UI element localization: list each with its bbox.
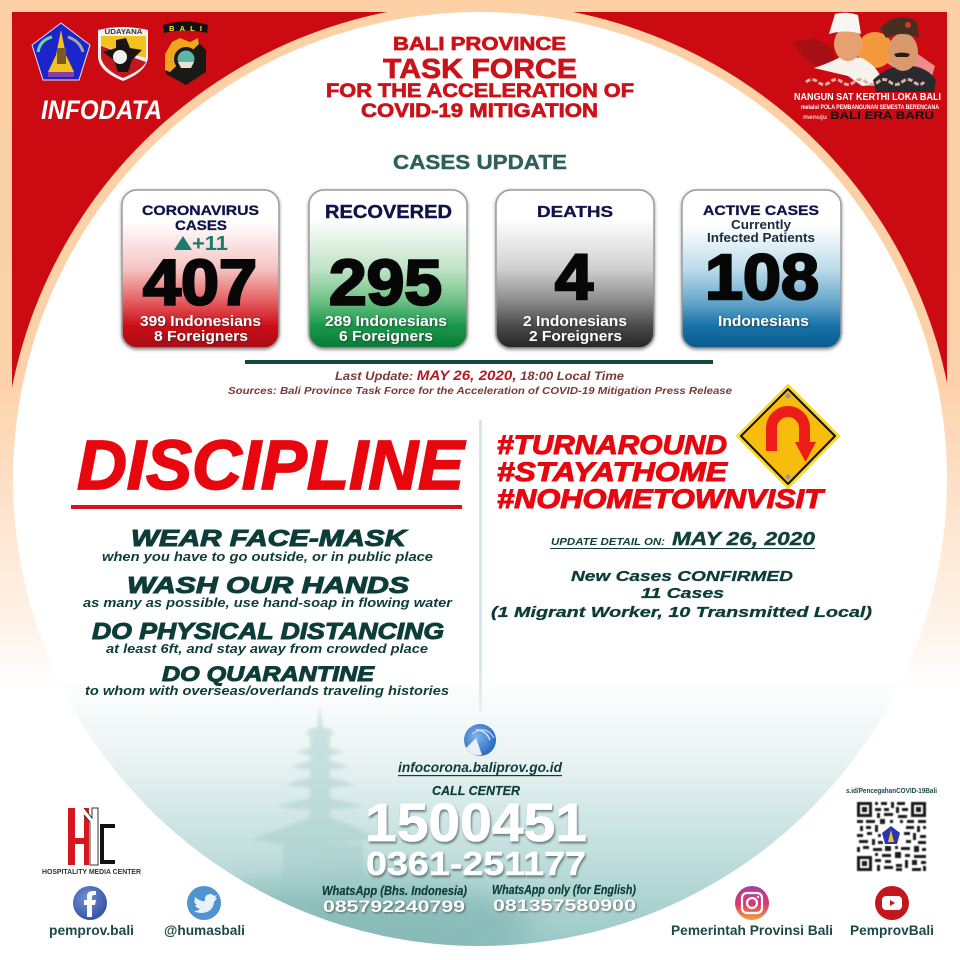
card subheading: Currently <box>731 217 792 232</box>
card heading: DEATHS <box>537 204 613 221</box>
last update line: Last Update: MAY 26, 2020, 18:00 Local Time <box>335 368 625 383</box>
icon: globe <box>464 724 496 756</box>
rule: quarantine <box>85 663 449 698</box>
breakdown: 2 Indonesians <box>523 313 627 330</box>
rule: wear face mask <box>102 525 433 564</box>
banner: Bali Era Baru governor portraits <box>793 13 941 122</box>
logo: Bali province crest <box>32 23 90 80</box>
panel: deaths <box>496 190 654 348</box>
icon: u-turn road sign <box>737 385 839 488</box>
card heading: ACTIVE CASES <box>703 202 819 218</box>
card heading: CORONAVIRUS <box>142 202 259 218</box>
facebook handle: pemprov.bali <box>49 922 134 938</box>
update detail date <box>550 529 815 549</box>
instagram name: Pemerintah Provinsi Bali <box>671 922 833 938</box>
divider rule <box>245 360 713 364</box>
icon: instagram <box>735 886 769 920</box>
panel: active cases <box>682 190 841 348</box>
title: BALI PROVINCE <box>393 34 566 54</box>
card heading <box>142 202 259 233</box>
title: TASK FORCE <box>383 53 577 84</box>
whatsapp indonesia <box>322 884 467 916</box>
right figure <box>873 17 936 92</box>
whatsapp english: 081357580900 <box>493 896 636 915</box>
rule: wear face mask: when you have to go outside, or in public place <box>102 549 433 564</box>
banner slogan: NANGUN SAT KERTHI LOKA BALI <box>794 92 941 103</box>
call center numbers: 1500451 <box>365 793 587 853</box>
rule: quarantine: DO QUARANTINE <box>162 663 375 686</box>
pagoda silhouette <box>240 706 380 888</box>
logo: hospitality media center <box>42 808 141 876</box>
call center numbers <box>365 793 587 882</box>
logo: hospitality media center: HOSPITALITY MEDIA CENTER <box>42 869 141 876</box>
left figure <box>814 13 884 86</box>
logo: Bali police badge: BALI <box>169 24 202 33</box>
rule: quarantine: to whom with overseas/overlands traveling histories <box>85 683 449 698</box>
new cases detail <box>491 568 872 621</box>
breakdown: 399 Indonesians <box>140 313 261 330</box>
qr code <box>857 802 926 871</box>
total number: 108 <box>705 241 819 313</box>
icon: twitter <box>187 886 221 920</box>
logo: Bali police badge <box>163 22 208 85</box>
card heading: RECOVERED <box>325 202 452 222</box>
title: FOR THE ACCELERATION OF <box>326 81 634 102</box>
banner menuju label: menuju <box>803 115 827 121</box>
total number: 4 <box>555 241 593 313</box>
youtube name: PemprovBali <box>850 922 934 938</box>
rule: wash hands <box>83 572 453 610</box>
hashtags <box>497 430 826 514</box>
call center numbers: 0361-251177 <box>366 845 586 882</box>
new cases detail: New Cases CONFIRMED <box>571 568 793 585</box>
discipline rules list <box>83 525 453 698</box>
whatsapp indonesia: WhatsApp (Bhs. Indonesia) <box>322 884 467 898</box>
icon: facebook <box>73 886 107 920</box>
daily increase <box>174 233 228 255</box>
bali map silhouette <box>793 38 838 68</box>
total number: 295 <box>329 246 442 318</box>
twitter handle: @humasbali <box>164 922 245 938</box>
whatsapp english <box>492 883 636 915</box>
infodata label: INFODATA <box>41 95 162 125</box>
sources line: Sources: Bali Province Task Force for the Acceleration of COVID-19 Mitigation Press Release <box>228 385 732 397</box>
rule: physical distancing: DO PHYSICAL DISTANCING <box>92 618 444 644</box>
whatsapp english: WhatsApp only (for English) <box>492 883 636 897</box>
title: COVID-19 MITIGATION <box>361 101 598 122</box>
breakdown <box>325 313 447 345</box>
update detail date: MAY 26, 2020 <box>672 529 815 549</box>
rule: physical distancing: at least 6ft, and stay away from crowded place <box>106 641 428 656</box>
teal lower gradient with pagoda <box>74 705 886 946</box>
card subheading <box>707 217 815 245</box>
rule: wear face mask: WEAR FACE-MASK <box>131 525 408 551</box>
new cases detail: 11 Cases <box>641 585 724 602</box>
ground haze <box>250 868 532 946</box>
daily increase: +11 <box>192 233 228 255</box>
logo: Udayana shield <box>98 27 148 81</box>
rule: wash hands: WASH OUR HANDS <box>127 572 410 598</box>
breakdown <box>523 313 627 345</box>
vertical column divider <box>479 420 482 712</box>
website: infocorona.baliprov.go.id <box>398 759 562 775</box>
qr link text: s.id/PencegahanCOVID-19Bali <box>846 788 937 795</box>
section heading: cases update: CASES UPDATE <box>393 152 567 174</box>
breakdown: 8 Foreigners <box>154 328 248 345</box>
breakdown: 2 Foreigners <box>529 328 622 345</box>
breakdown: 289 Indonesians <box>325 313 447 330</box>
hashtags: #NOHOMETOWNVISIT <box>497 484 826 514</box>
rule: physical distancing <box>92 618 444 656</box>
panel: recovered <box>309 190 467 348</box>
whatsapp indonesia: 085792240799 <box>323 897 465 916</box>
red header corners <box>12 12 947 388</box>
title <box>326 34 634 122</box>
sun <box>857 32 893 68</box>
call center label: CALL CENTER <box>432 784 520 798</box>
heading: discipline: DISCIPLINE <box>77 426 466 504</box>
balinese script strip <box>806 80 924 84</box>
card subheading: Infected Patients <box>707 230 815 245</box>
total number: 407 <box>143 246 257 318</box>
breakdown <box>140 313 261 345</box>
discipline underline <box>71 505 462 509</box>
new cases detail: (1 Migrant Worker, 10 Transmitted Local) <box>491 604 872 621</box>
breakdown: 6 Foreigners <box>339 328 433 345</box>
hashtags: #STAYATHOME <box>497 457 728 487</box>
icon: youtube <box>875 886 909 920</box>
update detail date: UPDATE DETAIL ON: <box>551 536 665 548</box>
logo: Udayana shield: UDAYANA <box>104 29 142 36</box>
panel: coronavirus cases <box>122 190 279 348</box>
breakdown: Indonesians <box>718 313 809 330</box>
banner era baru: BALI ERA BARU <box>830 110 934 122</box>
rule: wash hands: as many as possible, use hand-soap in flowing water <box>83 595 453 610</box>
card heading: CASES <box>175 217 227 233</box>
hashtags: #TURNAROUND <box>497 430 727 460</box>
